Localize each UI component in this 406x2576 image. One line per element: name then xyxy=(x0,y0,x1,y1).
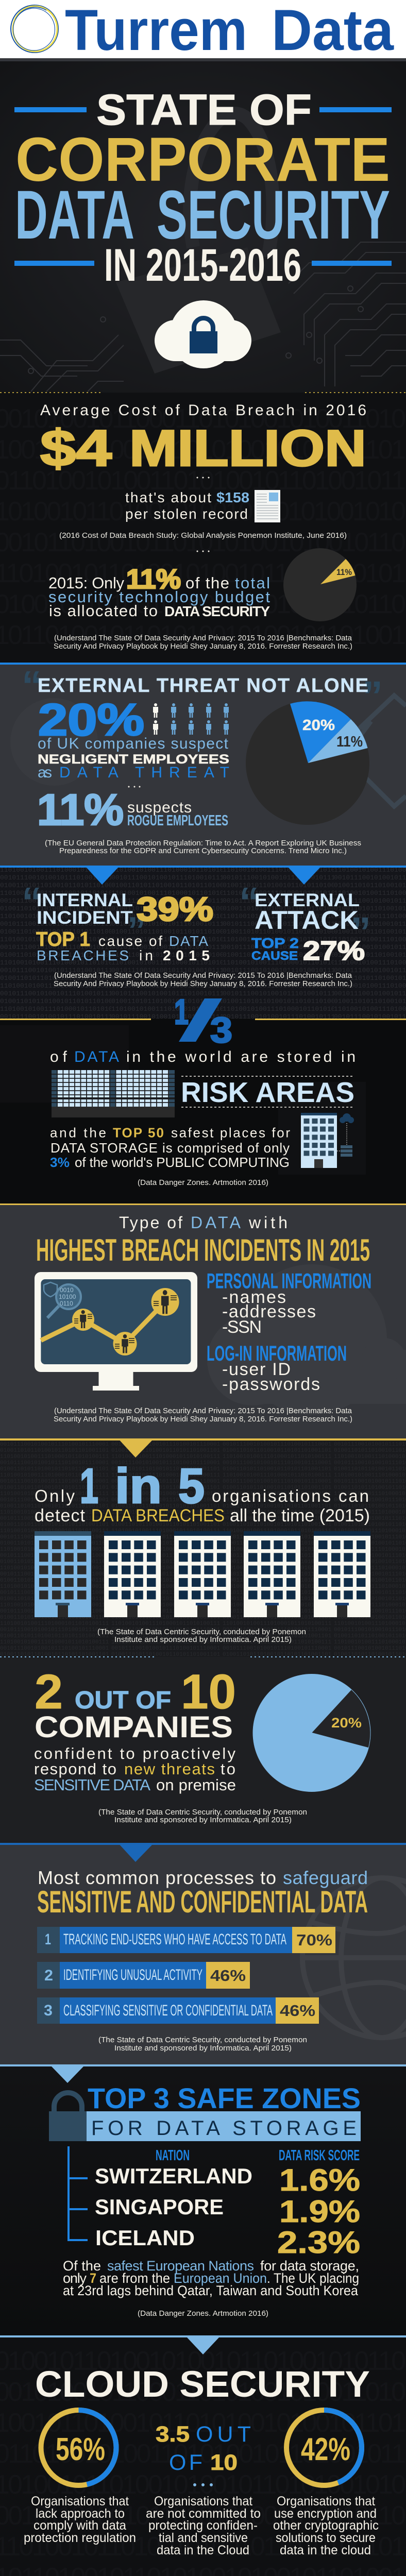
panel: average cost of breach xyxy=(0,393,406,665)
icon: building 5 xyxy=(314,1531,370,1617)
dots separator xyxy=(197,477,209,478)
citation: Institute and sponsored by Informatica. April 2015) xyxy=(114,2044,292,2053)
text: only 1 in 5: 5 xyxy=(178,1459,205,1514)
citation: (The State of Data Centric Security, conducted by Ponemon xyxy=(98,1808,307,1817)
panel: one third of data xyxy=(0,992,406,1205)
text: confident to respond: on premise xyxy=(156,1776,236,1794)
heading with quote marks xyxy=(22,663,383,719)
panel: 2 out of 10 companies xyxy=(0,1657,406,1845)
chart: rising line xyxy=(41,1302,165,1344)
stat: external attack: ” xyxy=(350,909,371,955)
panel: logo header xyxy=(0,0,406,62)
text column 3: use encryption and xyxy=(274,2506,377,2521)
text: only 1 in 5: all the time (2015) xyxy=(230,1506,370,1526)
panel: average cost of breach: 10100101101001010010110101001010 xyxy=(0,497,406,527)
bar: process 2, 46%: 46% xyxy=(210,1967,246,1985)
bar: process 3, 46%: 46% xyxy=(280,2002,315,2020)
text: safest European nations: at 23rd lags behind Qatar, Taiwan and South Korea xyxy=(63,2283,359,2298)
text: only 1 in 5: detect xyxy=(35,1506,86,1526)
text column 1: lack approach to xyxy=(36,2506,125,2521)
connector lines xyxy=(69,2146,88,2240)
heading: top 3 safe zones: TOP 3 SAFE ZONES xyxy=(88,2082,361,2114)
icon: building 4 xyxy=(244,1531,300,1617)
panel: top 3 safe zones xyxy=(0,2066,406,2337)
text: 11% of budget: total xyxy=(235,574,270,592)
icon: monitor with breach chart xyxy=(35,1272,197,1391)
list: log-in information: -passwords xyxy=(222,1375,320,1394)
text: only 1 in 5: organisations can xyxy=(212,1486,369,1505)
citation: (Understand The State Of Data Security And Privacy: 2015 To 2016 |Benchmarks: Data xyxy=(54,634,352,642)
text column 1: comply with data xyxy=(33,2518,126,2533)
citation: Institute and sponsored by Informatica. April 2015) xyxy=(114,1635,292,1644)
text column 2: are not committed to xyxy=(146,2506,261,2521)
text: top 50 safest places: DATA STORAGE is comprised of only xyxy=(50,1140,290,1156)
panel: average cost of breach: 00101001011000110101001010011010 xyxy=(0,404,406,434)
title line: Data Security: DATA xyxy=(15,177,134,253)
row: Iceland: 2.3% xyxy=(277,2225,360,2260)
citation: Security And Privacy Playbook by Heidi Shey January 8, 2016. Forrester Research Inc.) xyxy=(54,1415,352,1423)
stat: external attack: CAUSE xyxy=(251,949,298,963)
heading: type of data: DATA xyxy=(191,1213,241,1232)
citation: (Data Danger Zones. Artmotion 2016) xyxy=(138,2309,268,2318)
text: per stolen record: per stolen record xyxy=(125,506,248,522)
stat: internal incident: “ xyxy=(22,879,42,925)
citation: (Data Danger Zones. Artmotion 2016) xyxy=(138,1178,268,1187)
heading with quote marks: “ xyxy=(22,663,42,708)
stat: external attack: EXTERNAL xyxy=(255,890,360,910)
dots separator xyxy=(193,2483,213,2486)
arrow: light pointer xyxy=(187,2337,219,2354)
panel: cloud security: 11010010110100101001011010100101 xyxy=(0,2532,406,2562)
panel: most common processes xyxy=(0,1845,406,2066)
list: personal information: -SSN xyxy=(222,1317,262,1337)
citation: (2016 Cost of Data Breach Study: Global Analysis Ponemon Institute, June 2016) xyxy=(59,531,347,540)
stat: 2 out of 10: COMPANIES xyxy=(35,1710,233,1744)
panel: average cost of breach: 11010010110100101001011010100101 xyxy=(0,558,406,588)
stat: internal incident: in xyxy=(139,947,153,963)
citation: (The State of Data Centric Security, conducted by Ponemon xyxy=(98,2036,307,2044)
stat: external attack: “ xyxy=(239,879,260,925)
pie chart: 11%: 11% xyxy=(336,567,352,577)
title line: State of: STATE OF xyxy=(96,86,312,134)
icon: server rack grid xyxy=(52,1070,175,1117)
big fraction: one third: 1 xyxy=(174,992,189,1031)
text: per stolen record: that's about xyxy=(125,489,211,505)
stat: internal incident: cause of xyxy=(98,933,162,949)
row: Switzerland: 1.6% xyxy=(279,2163,360,2197)
bar: process 3, 46% xyxy=(37,1997,319,2024)
panel: average cost of breach: 10010110100101101010010100101101 xyxy=(0,435,406,465)
text: top 50 safest places: 3% xyxy=(50,1155,70,1170)
text: confident to respond: SENSITIVE DATA xyxy=(34,1776,150,1794)
text: only 1 in 5: Only xyxy=(35,1486,75,1505)
text: 11% of budget: 11% xyxy=(126,564,181,595)
text: of data in the world: of xyxy=(50,1048,67,1065)
text: negligent employees: of UK companies suspect xyxy=(38,735,229,752)
text column 3 xyxy=(273,2494,379,2557)
big fraction: one third xyxy=(174,992,232,1050)
text: confident to respond: respond to xyxy=(34,1760,116,1778)
text column 2: tial and sensitive xyxy=(159,2531,248,2545)
text: 11% of budget: is allocated to xyxy=(49,602,158,620)
list: personal information: -names xyxy=(222,1287,286,1307)
logo wordmark xyxy=(65,0,394,62)
stat: internal incident: 2015 xyxy=(163,947,210,963)
row: Switzerland: SWITZERLAND xyxy=(95,2164,252,2188)
title line: Data Security xyxy=(15,177,390,253)
citation: (The State of Data Centric Security, conducted by Ponemon xyxy=(97,1628,306,1636)
chart node: person 2 xyxy=(113,1332,137,1355)
stat: 3.5 out of 10: 10 xyxy=(210,2450,238,2475)
stat: 3.5 out of 10: 3.5 xyxy=(156,2422,190,2447)
panel: cloud security: 01101001010011010100101101001011 xyxy=(0,2439,406,2469)
text: top 50 safest places: safest places for xyxy=(171,1125,290,1141)
stat: internal incident: BREACHES xyxy=(37,947,129,963)
stat: 20%: 20% xyxy=(38,695,144,745)
panel: external threat not alone xyxy=(0,663,406,868)
icon: office building with cloud and server xyxy=(301,1113,354,1168)
stat: 11% rogue employees: 11% xyxy=(37,786,124,835)
stat: 3.5 out of 10: OF xyxy=(169,2450,202,2475)
heading: most common processes: Most common processes to xyxy=(38,1867,276,1888)
panel: average cost of breach: 10110100101101010010100101101001 xyxy=(0,620,406,650)
text: safest European nations xyxy=(63,2258,359,2298)
bar: process 1, 70%: 1 xyxy=(45,1931,51,1948)
bar: process 1, 70%: 70% xyxy=(296,1931,332,1949)
text: only 1 in 5: in xyxy=(115,1459,162,1514)
text column 3: Organisations that xyxy=(277,2494,375,2509)
banner: for data storage: FOR DATA STORAGE xyxy=(91,2117,357,2140)
stat: 11% rogue employees xyxy=(37,786,228,835)
text: top 50 safest places: of the world's PUBLIC COMPUTING xyxy=(75,1155,290,1170)
text: safest European nations: safest European Nations xyxy=(107,2258,254,2274)
chart node: person 3 xyxy=(151,1288,179,1316)
citation: Institute and sponsored by Informatica. April 2015) xyxy=(114,1816,292,1824)
icon: building 3 xyxy=(174,1531,231,1617)
list: personal information xyxy=(207,1269,371,1337)
text: 11% of budget: 2015: Only xyxy=(48,574,125,592)
citation: Security And Privacy Playbook by Heidi Shey January 8, 2016. Forrester Research Inc.) xyxy=(54,979,352,988)
arrow: light pointer xyxy=(52,2066,83,2083)
stat: internal incident: ” xyxy=(127,910,146,951)
text: confident to respond xyxy=(34,1744,236,1794)
stat: 3.5 out of 10 xyxy=(156,2422,251,2475)
text column 2: protecting confiden- xyxy=(148,2518,258,2533)
dots separator xyxy=(197,550,209,552)
text: top 50 safest places: and the xyxy=(50,1125,106,1141)
text: only 1 in 5: 1 xyxy=(80,1459,98,1514)
text: safest European nations: for data storage, xyxy=(260,2258,359,2274)
panel: internal vs external xyxy=(0,867,406,1019)
stat: external attack xyxy=(239,879,371,966)
stat: 2 out of 10: 10 xyxy=(181,1665,236,1719)
stat: internal incident: INTERNAL xyxy=(37,890,133,910)
text: per stolen record: $158 xyxy=(216,489,249,505)
text: top 50 safest places xyxy=(50,1125,290,1170)
icon: shield and magnifier: 0010 xyxy=(60,1286,74,1294)
panel: cloud security: 00101001011000110101001010011010 xyxy=(0,2377,406,2407)
title line: State of xyxy=(14,86,392,134)
text: 11% of budget xyxy=(48,564,270,620)
citation xyxy=(54,1406,352,1423)
row: Switzerland xyxy=(95,2163,360,2197)
arrow: blue pointer xyxy=(120,1845,152,1862)
text: only 1 in 5 xyxy=(35,1459,370,1526)
bar: process 1, 70% xyxy=(37,1927,335,1953)
text column 1 xyxy=(24,2494,136,2545)
stat: 2 out of 10 xyxy=(35,1665,236,1744)
text: 11% of budget: of the xyxy=(185,574,229,592)
ring chart: 56%: 56% xyxy=(56,2432,105,2467)
panel: average cost of breach: 00101101001011010101001010010110 xyxy=(0,528,406,557)
title line: In 2015-2016: IN 2015-2016 xyxy=(104,239,301,291)
title line: Corporate: CORPORATE xyxy=(15,124,390,194)
text: negligent employees: NEGLIGENT EMPLOYEES xyxy=(38,752,229,767)
text: 11% of budget: DATA SECURITY xyxy=(164,603,270,619)
text column 1: Organisations that xyxy=(31,2494,129,2509)
citation xyxy=(98,2036,307,2053)
icon: building 2 xyxy=(104,1531,161,1617)
stat: external attack: TOP 2 xyxy=(251,935,299,951)
big number: $4 million: MILLION xyxy=(129,419,366,477)
big fraction: one third: 3 xyxy=(210,1010,232,1050)
text: only 1 in 5: DATA BREACHES xyxy=(91,1506,225,1526)
panel: cloud security: 10100101101001010010110101001010 xyxy=(0,2470,406,2500)
text: safest European nations: Of the xyxy=(63,2258,101,2274)
pie chart: 11% xyxy=(283,548,357,621)
heading: most common processes xyxy=(37,1867,368,1919)
text column 2: data in the Cloud xyxy=(157,2543,249,2557)
text: 11% of budget: security technology budget xyxy=(48,588,270,606)
citation: (The EU General Data Protection Regulation: Time to Act. A Report Exploring UK Business xyxy=(45,839,361,848)
panel: type of data xyxy=(0,1205,406,1440)
text column 3: data in the cloud xyxy=(280,2543,371,2557)
stat: 2 out of 10: 2 xyxy=(35,1665,63,1719)
text: safest European nations: . The UK placing xyxy=(267,2270,359,2286)
citation xyxy=(54,971,352,988)
stat: external attack: ATTACK xyxy=(255,906,359,935)
arrow: right pointer xyxy=(288,867,320,885)
panel: average cost of breach: 01001011010010100101101001010110 xyxy=(0,589,406,619)
heading: type of data xyxy=(36,1213,370,1267)
heading: type of data: with xyxy=(248,1213,287,1232)
text: negligent employees xyxy=(38,735,229,781)
icon: logo ring xyxy=(11,5,58,53)
citation xyxy=(54,634,352,651)
panel: cloud security: 10010110100101101010010100101101 xyxy=(0,2408,406,2438)
citation xyxy=(45,839,361,855)
panel: cloud security xyxy=(0,2337,406,2576)
stat: external attack: 27% xyxy=(303,936,365,966)
icon: document xyxy=(255,490,280,522)
ring chart: 42% xyxy=(286,2410,362,2485)
row: Singapore: 1.9% xyxy=(279,2194,360,2229)
stat: internal incident xyxy=(22,879,213,963)
stat: internal incident: TOP 1 xyxy=(36,928,90,951)
heading: type of data: Type of xyxy=(119,1213,182,1232)
stat: 11% rogue employees: ROGUE EMPLOYEES xyxy=(127,812,228,829)
text: of data in the world: DATA xyxy=(74,1048,119,1065)
heading: most common processes: safeguard xyxy=(283,1867,368,1888)
text: safest European nations: are from the xyxy=(99,2270,170,2286)
heading with quote marks: EXTERNAL THREAT NOT ALONE xyxy=(38,675,368,697)
citation: Preparedness for the GDPR and Current Cybersecurity Concerns. Trend Micro Inc.) xyxy=(59,846,347,855)
stat: internal incident: DATA xyxy=(169,933,208,949)
row: Singapore: SINGAPORE xyxy=(95,2195,224,2219)
row: Singapore xyxy=(95,2194,360,2229)
pie chart: 20% and 11%: 11% xyxy=(336,734,363,750)
citation: Security And Privacy Playbook by Heidi Shey January 8, 2016. Forrester Research Inc.) xyxy=(54,642,352,651)
panel: 1 in 5 organisations xyxy=(0,1440,406,1657)
text: safest European nations: European Union xyxy=(174,2270,267,2286)
citation: (Understand The State Of Data Security And Privacy: 2015 To 2016 |Benchmarks: Data xyxy=(54,971,352,980)
text: confident to respond: new threats xyxy=(124,1760,215,1778)
big number: $4 million: $4 xyxy=(40,419,112,477)
list: personal information: -addresses xyxy=(222,1302,316,1321)
big number: $4 million xyxy=(40,419,366,477)
stat: internal incident: 39% xyxy=(137,890,213,928)
row: Iceland xyxy=(95,2225,360,2260)
citation xyxy=(98,1808,307,1824)
heading with quote marks: ” xyxy=(362,673,383,719)
stat: 3.5 out of 10: OUT xyxy=(196,2422,251,2447)
ring chart: 56% xyxy=(41,2410,116,2485)
citation xyxy=(97,1628,306,1644)
panel: hero title xyxy=(0,61,406,393)
stat: 2 out of 10: OUT OF xyxy=(75,1687,171,1714)
stat: internal incident: INCIDENT xyxy=(37,908,133,928)
panel: average cost of breach: 01101001010011010100101101001011 xyxy=(0,466,406,496)
stat: 11% rogue employees: suspects xyxy=(127,799,192,816)
heading: cloud security: CLOUD SECURITY xyxy=(35,2364,370,2405)
heading: average cost: Average Cost of Data Breach in 2016 xyxy=(40,402,366,419)
text: confident to respond: confident to proactively xyxy=(34,1744,235,1762)
row: Iceland: ICELAND xyxy=(95,2226,195,2250)
text: of data in the world: in the world are stored in xyxy=(126,1048,356,1065)
icon: people 2 of 10 xyxy=(153,703,229,735)
icon: shield and magnifier xyxy=(44,1282,81,1318)
text: negligent employees: as xyxy=(38,764,52,781)
panel: cloud security: 01001011010010100101101001010110 xyxy=(0,2346,406,2376)
bar: process 3, 46%: 3 xyxy=(44,2002,53,2019)
panel: cloud security: 00101101001011010101001010010110 xyxy=(0,2501,406,2531)
citation: (Understand The State Of Data Security And Privacy: 2015 To 2016 |Benchmarks: Data xyxy=(54,1406,352,1415)
text: safest European nations: 7 xyxy=(90,2270,96,2286)
text: per stolen record xyxy=(125,489,249,522)
ring chart: 42%: 42% xyxy=(301,2432,350,2467)
pie chart: 20% xyxy=(252,1674,371,1792)
pie chart: 20% and 11%: 20% xyxy=(302,717,335,734)
chart node: person 1 xyxy=(72,1309,94,1331)
pie chart: 20%: 20% xyxy=(331,1715,362,1731)
arrow: gold pointer xyxy=(120,1440,152,1458)
text column 1: protection regulation xyxy=(24,2531,136,2545)
bar: process 2, 46% xyxy=(37,1962,250,1989)
label: risk areas: RISK AREAS xyxy=(181,1076,354,1108)
icon: shield and magnifier: 0110 xyxy=(60,1300,73,1307)
list: log-in information xyxy=(207,1341,347,1394)
arrow: left pointer xyxy=(86,867,119,885)
bar: process 2, 46%: IDENTIFYING UNUSUAL ACTIVITY xyxy=(63,1967,202,1984)
text column 2 xyxy=(146,2494,261,2557)
text: negligent employees: DATA THREAT xyxy=(59,764,229,781)
icon: cloud with padlock xyxy=(155,300,251,368)
icon: padlock xyxy=(49,2093,87,2141)
table header xyxy=(156,2147,360,2164)
pie chart: 20% and 11% xyxy=(246,701,369,825)
text column 3: other cryptographic xyxy=(273,2518,379,2533)
bar: process 2, 46%: 2 xyxy=(44,1967,53,1984)
text: top 50 safest places: TOP 50 xyxy=(113,1125,164,1141)
text column 3: solutions to secure xyxy=(276,2531,376,2545)
dots separator xyxy=(128,786,140,787)
list: log-in information: -user ID xyxy=(222,1360,291,1379)
text: safest European nations: only xyxy=(63,2270,87,2286)
icon: shield and magnifier: 10100 xyxy=(59,1293,76,1300)
text: confident to respond: to xyxy=(221,1760,235,1778)
table header: NATION xyxy=(156,2147,190,2164)
text column 2: Organisations that xyxy=(154,2494,252,2509)
icon: highlighted building xyxy=(35,1531,91,1617)
